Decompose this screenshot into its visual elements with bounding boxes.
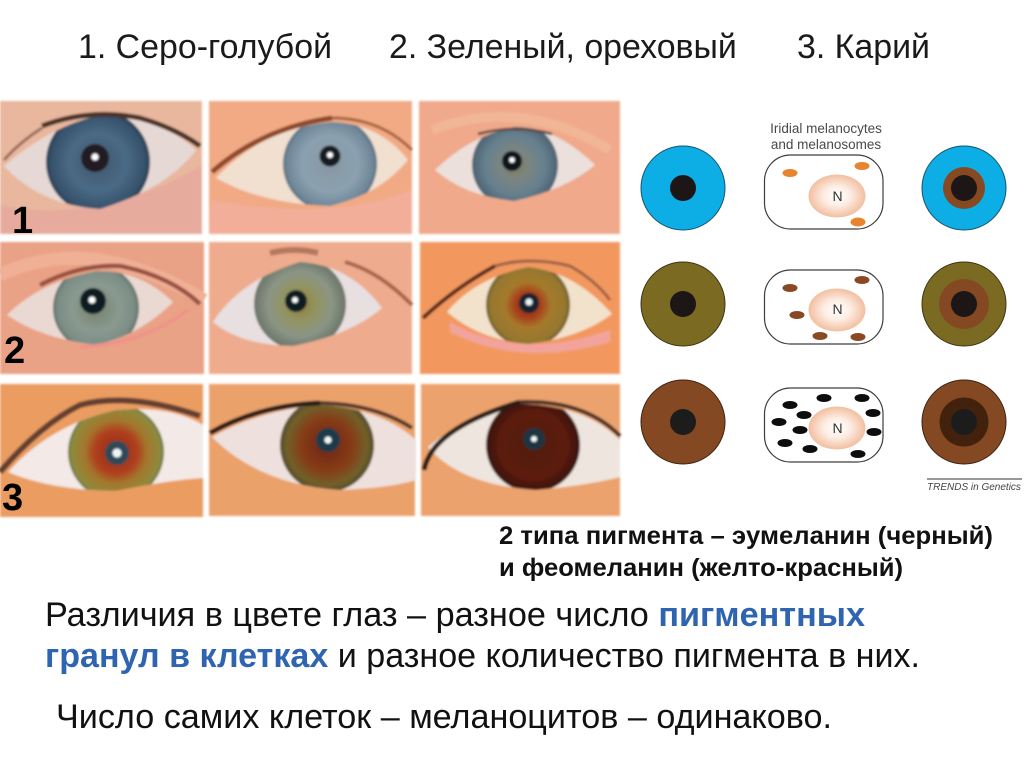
photo: row 2 column 1, grey-green eye bbox=[0, 242, 204, 374]
iris: blue with brown ring, right bbox=[922, 146, 1006, 230]
photo: row 3 column 3, dark brown eye bbox=[421, 384, 620, 516]
line 1: Различия в цвете глаз – разное число пигментных bbox=[45, 596, 865, 634]
row number 2: 2 bbox=[4, 330, 25, 372]
row number 3: 3 bbox=[2, 477, 23, 519]
cell: many black melanosomes: N bbox=[832, 420, 843, 436]
pigment types note: 2 типа пигмента – эумеланин (черный) bbox=[499, 522, 993, 550]
heading: brown: 3. Карий bbox=[797, 28, 930, 66]
cell: few orange melanosomes: N bbox=[832, 188, 843, 204]
heading: green, hazel: 2. Зеленый, ореховый bbox=[389, 28, 737, 66]
title row: eye colour categories bbox=[78, 28, 930, 66]
line 3: Число самих клеток – меланоцитов – одинаково. bbox=[56, 698, 832, 736]
photo: row 2 column 2, green-grey eye bbox=[209, 242, 412, 374]
photo: row 3 column 1, green-hazel eye bbox=[0, 384, 203, 517]
pigment types note: и феомеланин (желто-красный) bbox=[499, 554, 903, 582]
iris: brown with dark ring, right bbox=[922, 380, 1006, 464]
photo: row 2 column 3, hazel eye bbox=[420, 242, 620, 374]
iris: brown, left bbox=[641, 380, 725, 464]
photo: row 1 column 3, grey-blue eye with hazel centre bbox=[419, 101, 620, 234]
cell: few orange melanosomes bbox=[764, 155, 883, 229]
iris: olive, left bbox=[641, 262, 725, 346]
photo: row 1 column 2, grey-blue eye bbox=[209, 101, 412, 234]
row number 1: 1 bbox=[12, 200, 33, 242]
credit: TRENDS in Genetics: TRENDS in Genetics bbox=[927, 482, 1021, 493]
diagram heading: Iridial melanocytes bbox=[770, 121, 882, 136]
pigment types note bbox=[499, 522, 993, 582]
heading: grey-blue: 1. Серо-голубой bbox=[78, 28, 332, 66]
cell: brown melanosomes bbox=[764, 270, 883, 344]
diagram heading: and melanosomes bbox=[771, 137, 881, 152]
panel: melanocyte diagram bbox=[641, 121, 1022, 493]
explanation text bbox=[45, 596, 920, 736]
photo: row 3 column 2, light brown eye bbox=[209, 384, 416, 516]
cell: many black melanosomes bbox=[764, 388, 883, 462]
photo: row 1 column 1, blue eye bbox=[0, 101, 202, 234]
iris: olive with brown ring, right bbox=[922, 262, 1006, 346]
cell: brown melanosomes: N bbox=[832, 301, 843, 317]
iris: blue, left bbox=[641, 146, 725, 230]
panel: eye photographs bbox=[0, 101, 620, 519]
line 2: гранул в клетках и разное количество пигмента в них. bbox=[45, 637, 920, 675]
